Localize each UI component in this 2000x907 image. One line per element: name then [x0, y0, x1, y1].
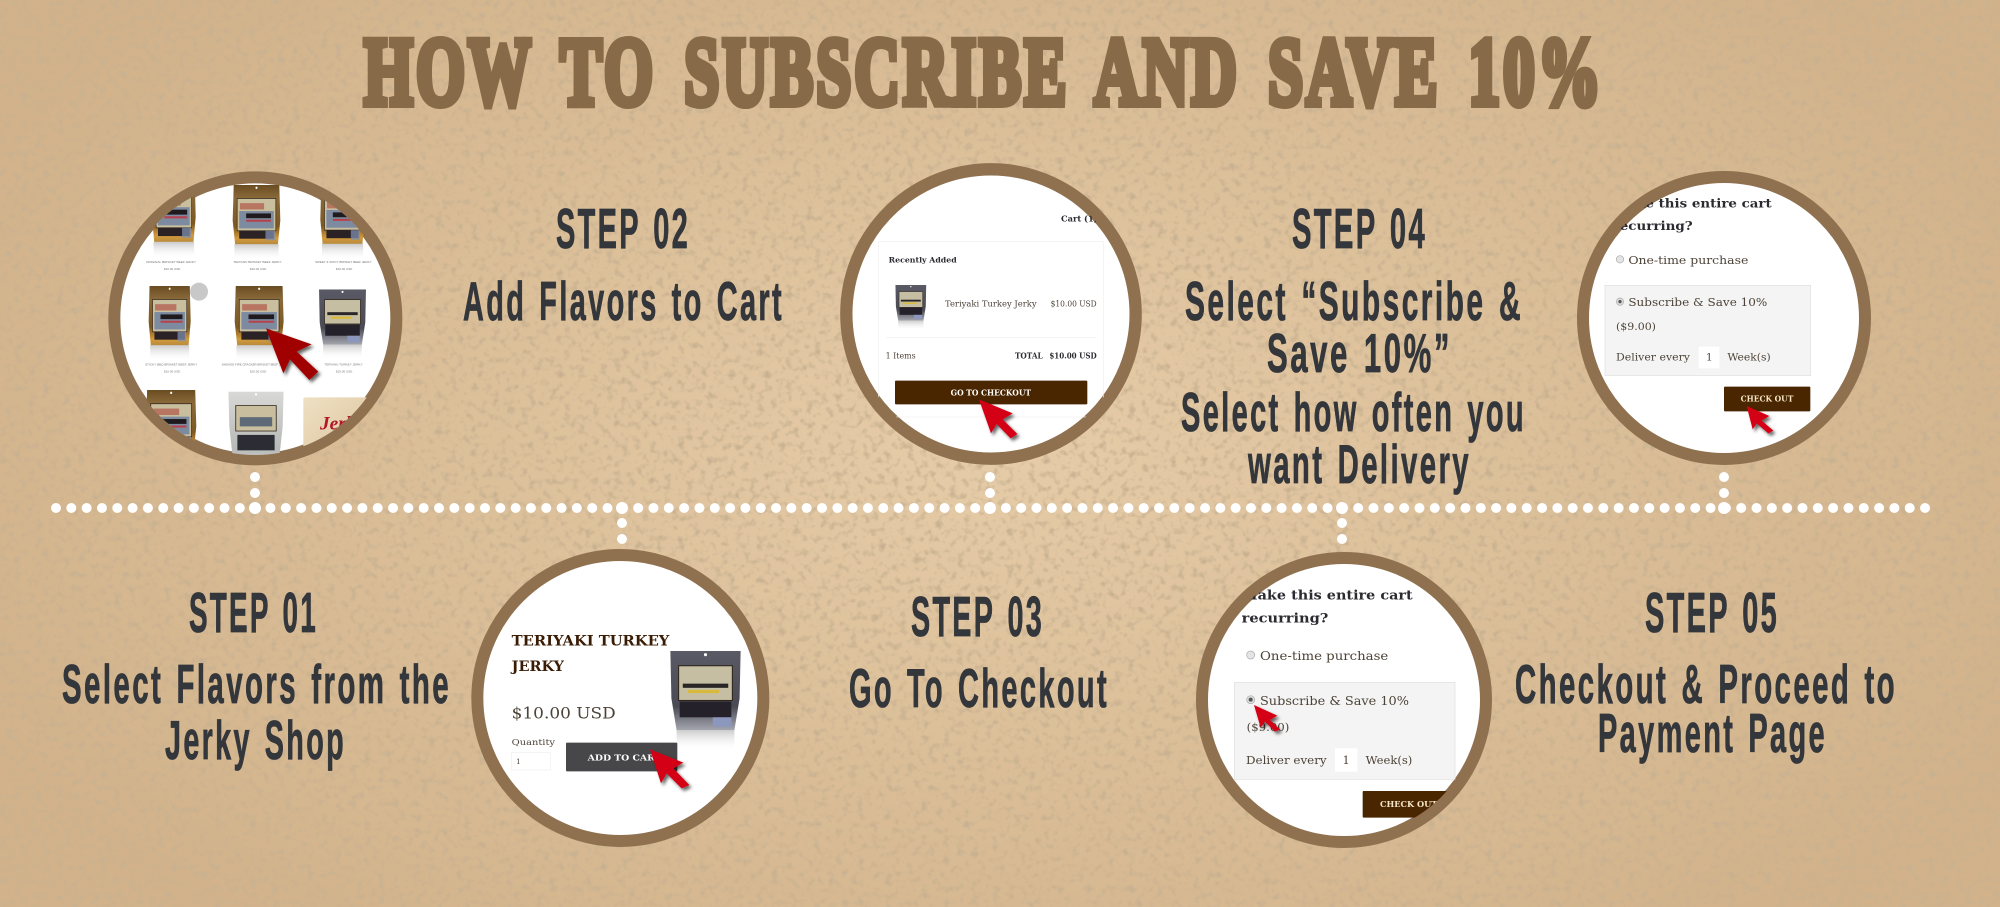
panel: step 02 screenshot circle: TERIYAKI TURKEY — [512, 633, 670, 649]
icon: cursor arrow — [979, 399, 1017, 438]
panel: step 04 screenshot circle: Subscribe & Save 10% — [1260, 694, 1409, 708]
panel: step 05 screenshot circle: recurring? — [1613, 219, 1693, 233]
panel: step 01 text: Jerky Shop — [165, 709, 346, 771]
panel: step 01 screenshot circle: $10.00 USD — [164, 267, 181, 271]
panel: step 04 text: STEP 04 — [1292, 197, 1427, 261]
panel: step 02 text: STEP 02 — [556, 197, 690, 261]
panel: step 02 screenshot circle: $10.00 USD — [512, 703, 616, 722]
panel: step 05 screenshot circle: 1 — [1706, 352, 1713, 364]
panel: step 05 text — [1515, 581, 1897, 764]
panel: step 03 screenshot circle: $10.00 USD — [1051, 300, 1097, 309]
panel: step 01 screenshot circle: TERIYAKI BRISKET BEEF JERKY — [233, 260, 282, 264]
panel: step 01 text: Select Flavors from the — [62, 653, 451, 715]
icon: cursor arrow — [1747, 406, 1773, 433]
panel: step 03 screenshot circle: $10.00 USD — [1049, 350, 1097, 360]
panel: step 02 screenshot circle: ADD TO CART — [587, 754, 662, 764]
panel: step 04 screenshot circle — [1202, 558, 1486, 842]
panel: step 04 text: want Delivery — [1247, 433, 1471, 495]
panel: step 05 screenshot circle: One-time purchase — [1628, 253, 1749, 267]
panel: step 01 screenshot circle: $10.00 USD — [250, 267, 267, 271]
panel: step 05 screenshot circle: Subscribe & Save 10% — [1628, 295, 1768, 309]
panel: step 03 screenshot circle — [846, 169, 1136, 459]
panel: step 01 screenshot circle: $10.00 USD — [336, 267, 353, 271]
panel: step 01 screenshot circle: ORIGINAL BRISKET BEEF JERKY — [146, 260, 196, 264]
panel: step 02 screenshot circle: 1 — [516, 757, 521, 766]
panel: step 01 text: STEP 01 — [189, 581, 318, 645]
panel: step 01 screenshot circle: SMOKED FIRE CRACKER BRISKET BEEF JERKY — [222, 363, 288, 367]
panel: step 04 screenshot circle: ($9.00) — [1247, 721, 1289, 734]
panel: step 01 screenshot circle: $10.00 USD — [336, 370, 353, 374]
panel: step 04 screenshot circle: One-time purchase — [1260, 649, 1388, 663]
panel: step 03 screenshot circle: GO TO CHECKOUT — [951, 388, 1031, 398]
panel: step 03 screenshot circle: 1 Items — [886, 351, 916, 360]
panel: step 05 screenshot circle: CHECK OUT — [1741, 394, 1793, 404]
panel: step 04 text — [1181, 197, 1526, 495]
panel: step 01 screenshot circle: TERIYAKI TURKEY JERKY — [324, 363, 363, 367]
panel: step 04 screenshot circle: Deliver every — [1246, 754, 1328, 767]
panel: step 01 screenshot circle — [114, 177, 396, 467]
panel: step 02 text: Add Flavors to Cart — [463, 270, 784, 332]
panel: step 03 screenshot circle: Recently Added — [889, 255, 957, 264]
panel: step 04 screenshot circle: Week(s) — [1366, 754, 1412, 767]
panel: step 02 screenshot circle: Quantity — [512, 738, 555, 748]
panel: step 03 text: Go To Checkout — [849, 657, 1109, 719]
panel: step 04 screenshot circle: CHECK OUT — [1380, 800, 1438, 810]
panel: step 03 text — [849, 585, 1109, 719]
panel: step 05 screenshot circle: Week(s) — [1727, 352, 1771, 364]
timeline dotted line — [56, 472, 1932, 544]
panel: step 03 screenshot circle: Cart (1) — [1061, 213, 1098, 223]
icon: cursor arrow — [650, 749, 689, 788]
panel: step 01 screenshot circle: $10.00 USD — [250, 370, 267, 374]
panel: step 04 screenshot circle: Make this entire cart — [1242, 587, 1413, 602]
panel: step 02 text — [463, 197, 784, 332]
panel: step 04 screenshot circle: recurring? — [1242, 611, 1328, 626]
panel: step 01 text — [62, 581, 451, 771]
icon: cursor arrow — [266, 328, 318, 380]
panel: step 05 screenshot circle — [1583, 177, 1865, 459]
panel: step 02 screenshot circle — [477, 555, 763, 841]
panel: step 05 screenshot circle: Make this entire cart — [1613, 197, 1772, 211]
panel: step 05 text: STEP 05 — [1645, 581, 1779, 645]
panel: step 01 screenshot circle: SWEET & SPICY BRISKET BEEF JERKY — [315, 260, 372, 264]
panel: step 04 screenshot circle: 1 — [1343, 754, 1350, 767]
panel: step 03 screenshot circle: TOTAL — [1015, 350, 1043, 360]
panel: step 01 screenshot circle: Jerky — [319, 413, 364, 434]
panel: step 02 screenshot circle: JERKY — [510, 659, 565, 675]
panel: step 03 screenshot circle: Teriyaki Turkey Jerky — [945, 300, 1037, 309]
panel: step 01 screenshot circle: STICKY BBQ BRISKET BEEF JERKY — [145, 363, 197, 367]
panel: step 04 text: Select “Subscribe & — [1185, 270, 1523, 332]
panel: step 03 text: STEP 03 — [911, 585, 1044, 649]
panel: step 05 screenshot circle: ($9.00) — [1616, 321, 1656, 333]
panel: step 05 screenshot circle: Deliver every — [1616, 352, 1690, 364]
icon: cursor arrow — [1254, 705, 1280, 732]
panel: step 04 text: Select how often you — [1181, 381, 1526, 443]
panel: step 04 text: Save 10%” — [1267, 322, 1452, 384]
panel: step 01 screenshot circle: $10.00 USD — [164, 370, 181, 374]
